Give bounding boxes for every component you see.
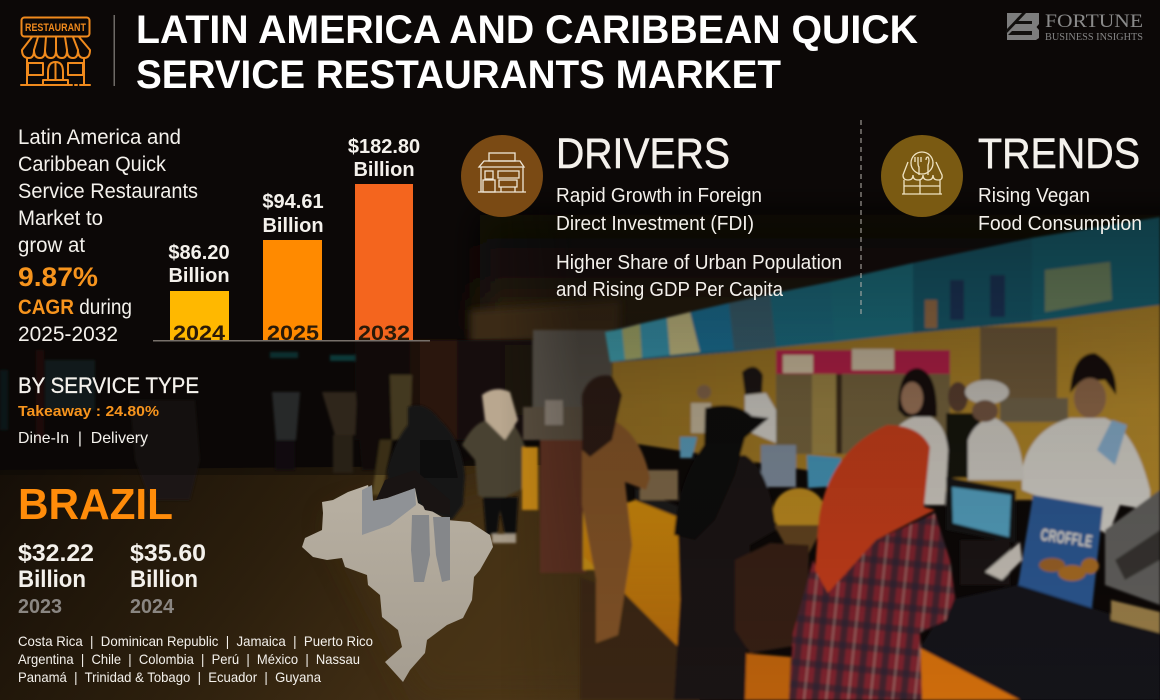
POS screens [946,477,1016,543]
stat: Brazil 2024: 2024 [130,596,175,618]
title [136,8,918,97]
text block: market growth summary: Latin America and [18,126,181,149]
text block: by service type: Dine-In | Delivery [18,430,148,447]
stat: Brazil 2023 [18,540,94,618]
text block: countries: Argentina | Chile | Colombia | Perú | México | Nassau [18,651,360,667]
stat: Brazil 2023: Billion [18,566,86,593]
staff [1022,418,1150,535]
heading: trends: TRENDS [978,130,1140,178]
title: LATIN AMERICA AND CARIBBEAN QUICK [136,8,918,52]
bar chart: market size by year: 2024 [173,322,225,345]
stat: Brazil 2024: $35.60 [130,540,206,567]
heading: Brazil: BRAZIL [18,480,173,529]
text block: countries: Costa Rica | Dominican Republic | Jamaica | Puerto Rico [18,633,373,649]
bar chart: market size by year: $86.20 [168,242,230,264]
text block: trends list: Food Consumption [978,213,1142,235]
counters [584,500,691,660]
text block: market growth summary: Caribbean Quick [18,153,166,176]
text block: by service type [18,373,199,447]
popcorn machines [776,350,950,374]
stat: Brazil 2024 [130,540,206,618]
text block: countries: Panamá | Trinidad & Tobago | Ecuador | Guyana [18,669,321,685]
text block: drivers list: Higher Share of Urban Population [556,252,842,274]
text block: market growth summary: grow at [18,234,85,257]
text block: drivers list [556,185,842,301]
olive coat customer [462,420,532,503]
text block: market growth summary: 2025-2032 [18,323,118,346]
icon: drivers storefront [461,135,543,217]
bar chart: market size by year: Billion [262,215,324,237]
text block: by service type: Takeaway : 24.80% [18,403,159,420]
icon: trends restaurant with fork and spoon [881,135,963,217]
bar chart: market size by year: $94.61 [262,191,324,213]
bar chart: market size by year: Billion [168,265,230,287]
text block: market growth summary: Market to [18,207,103,230]
icon label: RESTAURANT sign text: RESTAURANT [25,22,86,34]
text block: market growth summary: 9.87% [18,262,98,292]
text block: drivers list: and Rising GDP Per Capita [556,279,784,301]
text block: countries [18,633,373,685]
logo: Fortune Business Insights [1006,11,1143,43]
customer in plaid and hijab [789,513,955,700]
popcorn basket [773,488,825,536]
stat: Brazil 2023: 2023 [18,596,62,618]
wall and menu boards [612,305,1160,500]
bar chart: market size by year: $182.80 [348,136,420,158]
title: SERVICE RESTAURANTS MARKET [136,53,781,97]
logo: Fortune Business Insights: BUSINESS INSIGHTS [1045,32,1143,43]
icon: restaurant storefront [21,18,90,85]
background photo: restaurant counter [0,216,1160,700]
heading: drivers: DRIVERS [556,130,730,178]
bar chart: market size by year [153,136,430,345]
text block: market growth summary: Service Restaurants [18,180,198,203]
text block: drivers list: Direct Investment (FDI) [556,213,754,235]
text block: market growth summary: CAGR during [18,296,132,319]
stat: Brazil 2024: Billion [130,566,198,593]
map: Brazil [302,470,493,682]
side counter [540,440,586,573]
stat: Brazil 2023: $32.22 [18,540,94,567]
text block: market growth summary [18,126,198,346]
backpack customer [387,405,465,520]
text block: trends list: Rising Vegan [978,185,1090,207]
background photo: restaurant counter: CROFFLE [1039,525,1094,551]
bar chart: market size by year: Billion [353,159,415,181]
bar chart: market size by year: 2025 [267,322,319,345]
text block: trends list [978,185,1142,235]
promo sign [1018,495,1103,608]
text block: drivers list: Rapid Growth in Foreign [556,185,762,207]
customer in black [674,455,776,700]
text block: by service type: BY SERVICE TYPE [18,373,199,398]
left screens and crowd [45,360,95,410]
logo: Fortune Business Insights: FORTUNE [1045,11,1143,32]
bar chart: market size by year: 2032 [358,322,410,345]
customer in brown [582,418,650,643]
